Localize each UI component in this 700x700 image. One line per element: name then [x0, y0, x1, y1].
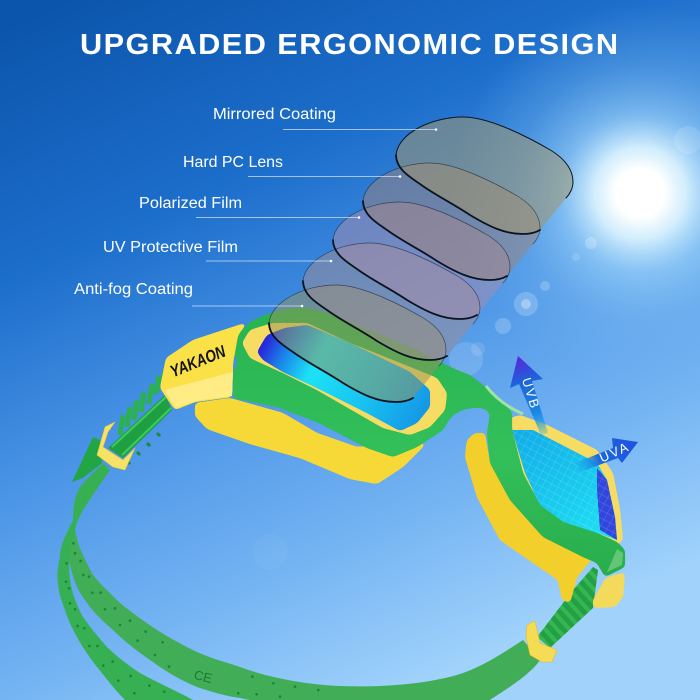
- left strap tab: [72, 437, 102, 482]
- label: UV Protective Film: UV Protective Film: [103, 239, 238, 256]
- arrow: UVB: [510, 356, 548, 435]
- left ribbed strap: [108, 370, 172, 464]
- exploded lens layers: [269, 117, 573, 402]
- layer: anti-fog coating: [269, 285, 446, 402]
- housing highlight: [164, 372, 233, 408]
- CE mark: CE: [193, 667, 214, 686]
- left lens glass: [257, 325, 430, 431]
- right yellow seal: [465, 433, 593, 603]
- lens flares: [252, 126, 700, 570]
- arrow: UVA: [575, 438, 638, 472]
- layer: hard PC lens: [363, 163, 540, 280]
- right eyepiece: [465, 415, 625, 608]
- layer: mirrored coating: [396, 117, 573, 234]
- goggle frame and bridge: [230, 308, 625, 577]
- strap dots: [65, 542, 320, 698]
- layer: UV protective film: [303, 243, 480, 360]
- right lens grid: [512, 430, 617, 540]
- right lens rim: [510, 415, 623, 545]
- right lens blue edge: [597, 468, 617, 540]
- title: UPGRADED ERGONOMIC DESIGN: [80, 29, 619, 61]
- bridge highlight: [486, 386, 523, 414]
- label: Mirrored Coating: Mirrored Coating: [213, 106, 336, 123]
- label: Hard PC Lens: Hard PC Lens: [183, 154, 283, 171]
- left yellow seal: [195, 398, 427, 484]
- layer: polarized film: [333, 202, 510, 319]
- right ribbed strap: [537, 567, 598, 648]
- outer strap band: [57, 463, 193, 700]
- logo: YAKAON: [167, 342, 229, 381]
- left buckle: [97, 422, 135, 470]
- sun glow: [0, 0, 700, 420]
- right yellow clip: [593, 572, 625, 608]
- label: Polarized Film: Polarized Film: [139, 195, 242, 212]
- goggle strap: [57, 370, 598, 700]
- yellow housing: [160, 322, 248, 410]
- arrow: UVB: UVB: [519, 376, 543, 412]
- inner strap band: [69, 530, 540, 700]
- right buckle: [526, 621, 557, 662]
- label: Anti-fog Coating: Anti-fog Coating: [74, 281, 193, 298]
- right lens glass: [512, 430, 617, 540]
- strap housing with logo: [160, 322, 248, 410]
- frame lower highlight: [607, 549, 623, 572]
- left lens rim: [242, 323, 447, 435]
- lens outlines: [269, 117, 573, 402]
- arrow: UVA: UVA: [597, 439, 632, 465]
